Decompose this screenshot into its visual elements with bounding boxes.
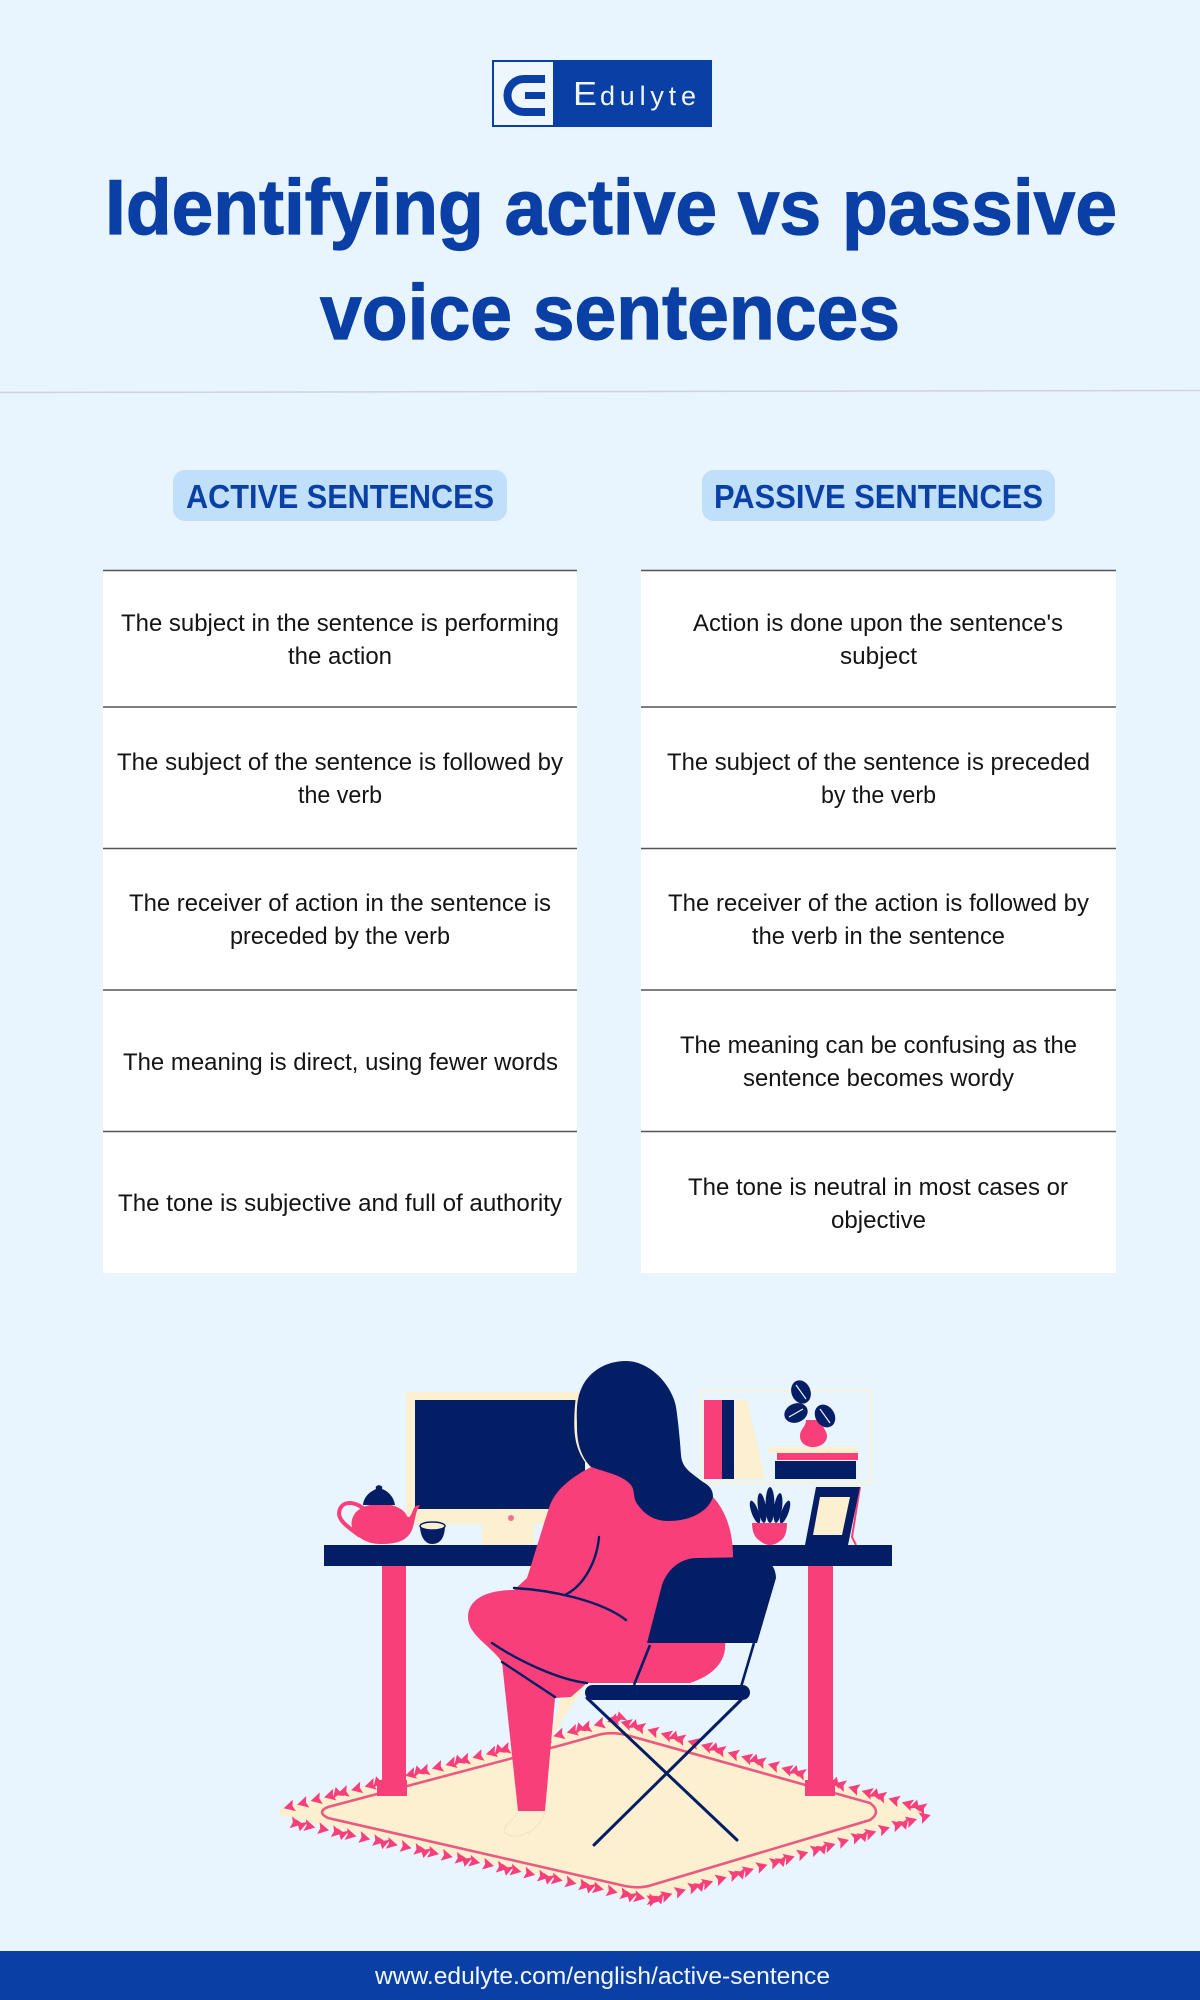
row 2: The subject of the sentence is followed by: [117, 749, 564, 776]
row 3: The receiver of action in the sentence is: [129, 890, 551, 917]
row 4: sentence becomes wordy: [743, 1065, 1015, 1092]
row 2: The subject of the sentence is preceded: [667, 749, 1090, 776]
row 1: [121, 610, 559, 670]
row 1: The subject in the sentence is performing: [121, 610, 559, 637]
row 1: [693, 610, 1063, 670]
illustration: woman working at desk: [260, 1361, 924, 1900]
row 4: The meaning is direct, using fewer words: [123, 1049, 558, 1076]
row 4: The meaning can be confusing as the: [680, 1032, 1077, 1059]
woman: body: [468, 1467, 733, 1811]
logo: Edulyte: [492, 60, 712, 127]
chair: [585, 1557, 776, 1845]
row 2: the verb: [298, 782, 382, 809]
footer bar with URL: [0, 1951, 1200, 2000]
row 5: The tone is neutral in most cases or: [688, 1174, 1068, 1201]
row 1: Action is done upon the sentence's: [693, 610, 1063, 637]
woman: hair: [576, 1361, 713, 1521]
panel: active sentences: [103, 470, 577, 1273]
heading: passive sentences: [702, 470, 1055, 521]
row 3: The receiver of the action is followed by: [668, 890, 1090, 917]
desk: [324, 1545, 892, 1796]
logo: Edulyte: E: [573, 75, 597, 112]
panel: passive sentences: [641, 470, 1116, 1273]
table: passive sentences: [641, 570, 1116, 1273]
logo: Edulyte: dulyte: [600, 81, 696, 111]
title: Identifying active vs passive: [105, 163, 1117, 251]
title: voice sentences: [320, 268, 900, 356]
table: active sentences: [103, 570, 577, 1273]
row 5: [688, 1174, 1068, 1234]
row 2: [117, 749, 564, 809]
shelf with books and plant: [701, 1377, 871, 1483]
row 3: the verb in the sentence: [752, 923, 1005, 950]
row 1: subject: [840, 643, 917, 670]
rug: [260, 1718, 924, 1900]
row 1: the action: [288, 643, 392, 670]
title: [105, 163, 1117, 356]
heading: active sentences: ACTIVE SENTENCES: [186, 478, 494, 515]
row 5: objective: [831, 1207, 926, 1234]
row 3: [668, 890, 1090, 950]
woman: clothing lines: [492, 1537, 626, 1697]
footer bar with URL: www.edulyte.com/english/active-sentence: [374, 1963, 830, 1990]
row 4: [680, 1032, 1077, 1092]
row 3: [129, 890, 551, 950]
heading: passive sentences: PASSIVE SENTENCES: [714, 478, 1043, 515]
row 3: preceded by the verb: [230, 923, 450, 950]
potted plant: [748, 1487, 792, 1545]
row 5: The tone is subjective and full of authority: [118, 1190, 563, 1217]
teapot: [339, 1485, 420, 1544]
row 2: [667, 749, 1090, 809]
row 2: by the verb: [821, 782, 936, 809]
picture frame: [805, 1487, 860, 1545]
heading: active sentences: [173, 470, 507, 521]
cup: [420, 1522, 445, 1544]
woman: back leg and foot: [504, 1685, 585, 1836]
monitor: [406, 1392, 586, 1545]
